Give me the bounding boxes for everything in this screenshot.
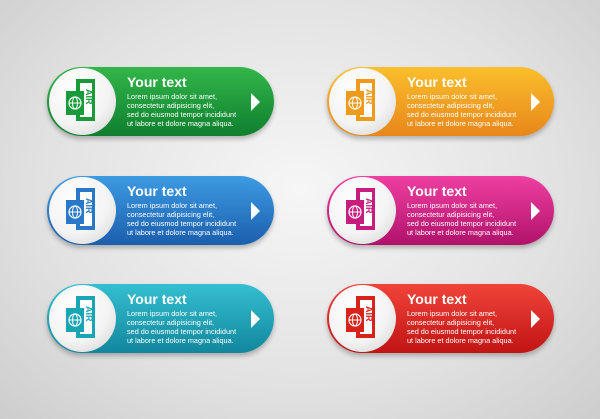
icon: air ticket passport: AIR: [364, 306, 374, 322]
title: Your text: [407, 291, 467, 307]
body text: ut labore et dolore magna aliqua.: [127, 228, 234, 237]
body text: [407, 201, 516, 237]
body text: consectetur adipisicing elit,: [407, 318, 494, 327]
body text: Lorem ipsum dolor sit amet,: [127, 201, 217, 210]
arrow: [531, 310, 540, 328]
icon: air ticket passport: AIR: [364, 89, 374, 105]
arrow: [531, 202, 540, 220]
body text: consectetur adipisicing elit,: [407, 210, 494, 219]
body text: sed do eiusmod tempor incididunt: [127, 219, 236, 228]
icon: air ticket passport: [329, 68, 396, 135]
arrow: [251, 310, 260, 328]
icon: air ticket passport: AIR: [84, 198, 94, 214]
icon: air ticket passport: [49, 177, 116, 244]
icon: air ticket passport: [329, 177, 396, 244]
title: Your text: [127, 183, 187, 199]
body text: consectetur adipisicing elit,: [127, 210, 214, 219]
title: Your text: [127, 291, 187, 307]
title: Your text: [407, 74, 467, 90]
body text: sed do eiusmod tempor incididunt: [407, 327, 516, 336]
arrow: [251, 93, 260, 111]
body text: [407, 92, 516, 128]
body text: Lorem ipsum dolor sit amet,: [127, 92, 217, 101]
icon: air ticket passport: AIR: [84, 306, 94, 322]
body text: ut labore et dolore magna aliqua.: [127, 336, 234, 345]
button: red: [327, 284, 554, 353]
icon: air ticket passport: [49, 285, 116, 352]
title: Your text: [127, 74, 187, 90]
body text: Lorem ipsum dolor sit amet,: [407, 309, 497, 318]
body text: consectetur adipisicing elit,: [127, 318, 214, 327]
body text: ut labore et dolore magna aliqua.: [407, 119, 514, 128]
button: green: [47, 67, 274, 136]
icon: air ticket passport: AIR: [364, 198, 374, 214]
title: Your text: [407, 183, 467, 199]
body text: Lorem ipsum dolor sit amet,: [407, 201, 497, 210]
body text: ut labore et dolore magna aliqua.: [407, 336, 514, 345]
body text: sed do eiusmod tempor incididunt: [127, 110, 236, 119]
body text: sed do eiusmod tempor incididunt: [407, 219, 516, 228]
body text: Lorem ipsum dolor sit amet,: [127, 309, 217, 318]
body text: ut labore et dolore magna aliqua.: [407, 228, 514, 237]
button: magenta: [327, 176, 554, 245]
body text: Lorem ipsum dolor sit amet,: [407, 92, 497, 101]
arrow: [251, 202, 260, 220]
body text: [127, 92, 236, 128]
body text: ut labore et dolore magna aliqua.: [127, 119, 234, 128]
body text: [127, 201, 236, 237]
body text: [127, 309, 236, 345]
body text: consectetur adipisicing elit,: [407, 101, 494, 110]
button: blue: [47, 176, 274, 245]
button: orange: [327, 67, 554, 136]
body text: [407, 309, 516, 345]
body text: consectetur adipisicing elit,: [127, 101, 214, 110]
icon: air ticket passport: [329, 285, 396, 352]
arrow: [531, 93, 540, 111]
icon: air ticket passport: AIR: [84, 89, 94, 105]
button: teal: [47, 284, 274, 353]
body text: sed do eiusmod tempor incididunt: [127, 327, 236, 336]
body text: sed do eiusmod tempor incididunt: [407, 110, 516, 119]
icon: air ticket passport: [49, 68, 116, 135]
